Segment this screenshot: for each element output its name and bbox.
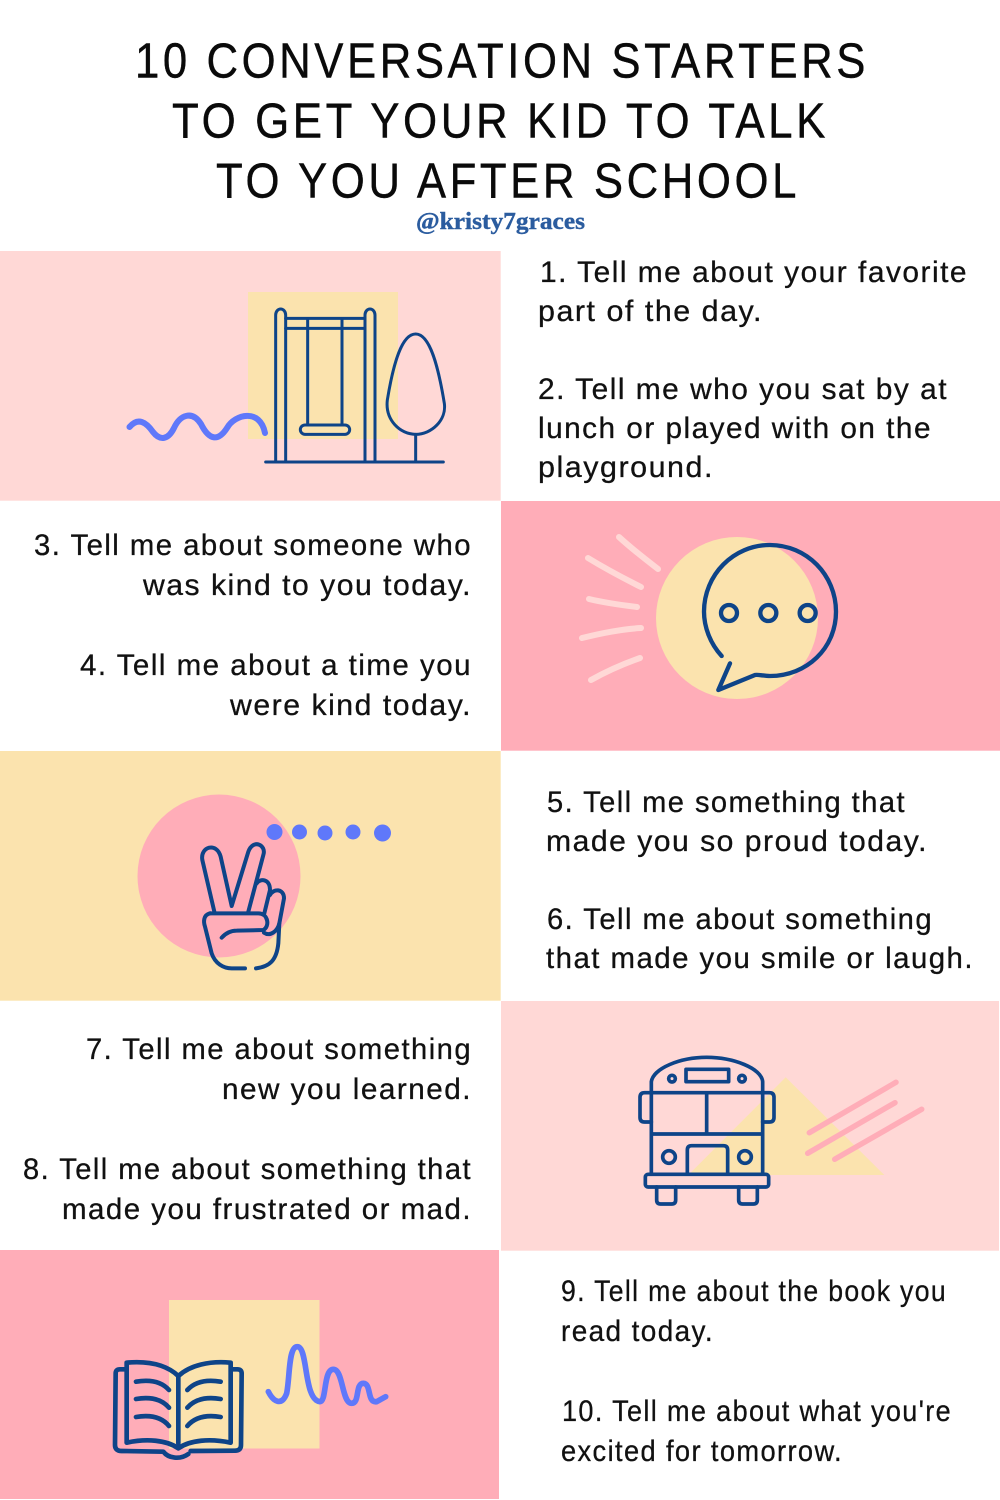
text: questions 7 and 8 (23, 1033, 472, 1226)
text: questions 3 and 4: 4. Tell me about a time you (80, 649, 472, 682)
text: questions 1 and 2: 2. Tell me who you sat by at (538, 373, 948, 406)
panel: swing illustration (0, 251, 501, 501)
text: questions 7 and 8: new you learned. (222, 1073, 472, 1106)
text: questions 5 and 6: 5. Tell me something that (547, 786, 906, 819)
pink speed lines (808, 1082, 922, 1159)
icon: open book (115, 1362, 242, 1458)
title (135, 34, 869, 208)
text: questions 5 and 6: 6. Tell me about something (547, 903, 933, 936)
text: questions 5 and 6: that made you smile or laugh. (546, 942, 974, 975)
blue dots (266, 824, 391, 842)
text: questions 9 and 10: 10. Tell me about what you're (562, 1395, 952, 1428)
text: questions 5 and 6: made you so proud today. (546, 825, 928, 858)
text: questions 3 and 4: 3. Tell me about someone who (34, 529, 472, 562)
text: questions 5 and 6 (546, 786, 974, 975)
yellow square (248, 292, 398, 439)
author handle: @kristy7graces (416, 209, 585, 235)
title: 10 CONVERSATION STARTERS (135, 34, 869, 88)
title: TO GET YOUR KID TO TALK (172, 94, 829, 148)
text: questions 7 and 8: 8. Tell me about something that (23, 1153, 472, 1186)
icon: peace sign hand (202, 844, 284, 968)
text: questions 3 and 4: was kind to you today. (142, 569, 472, 602)
text: questions 1 and 2 (538, 256, 968, 484)
text: questions 1 and 2: part of the day. (538, 295, 763, 328)
panel: peace hand illustration (0, 751, 501, 1001)
text: questions 7 and 8: 7. Tell me about something (86, 1033, 472, 1066)
text: questions 7 and 8: made you frustrated or mad. (62, 1193, 472, 1226)
icon: speech bubble (704, 545, 836, 690)
title: TO YOU AFTER SCHOOL (216, 154, 800, 208)
text: questions 9 and 10: read today. (561, 1315, 714, 1348)
icon: school bus (640, 1057, 774, 1204)
panel: open book illustration (0, 1250, 499, 1499)
yellow rectangle (169, 1300, 320, 1448)
text: questions 1 and 2: 1. Tell me about your favorite (540, 256, 968, 289)
icon: swing set and tree (266, 309, 445, 462)
blue wave (130, 416, 265, 438)
text: questions 9 and 10: excited for tomorrow. (561, 1435, 843, 1468)
text: questions 9 and 10 (561, 1275, 952, 1468)
blue squiggle (268, 1347, 386, 1403)
light rays (582, 537, 658, 680)
panel: school bus illustration (501, 1001, 999, 1251)
pink circle (138, 794, 300, 958)
text: questions 3 and 4 (34, 529, 472, 722)
yellow triangle (688, 1077, 884, 1175)
yellow circle (656, 537, 818, 699)
text: questions 3 and 4: were kind today. (229, 689, 472, 722)
text: questions 1 and 2: lunch or played with on the (538, 412, 932, 445)
text: questions 9 and 10: 9. Tell me about the book you (561, 1275, 947, 1308)
panel: speech bubble illustration (501, 501, 1000, 751)
text: questions 1 and 2: playground. (538, 451, 714, 484)
